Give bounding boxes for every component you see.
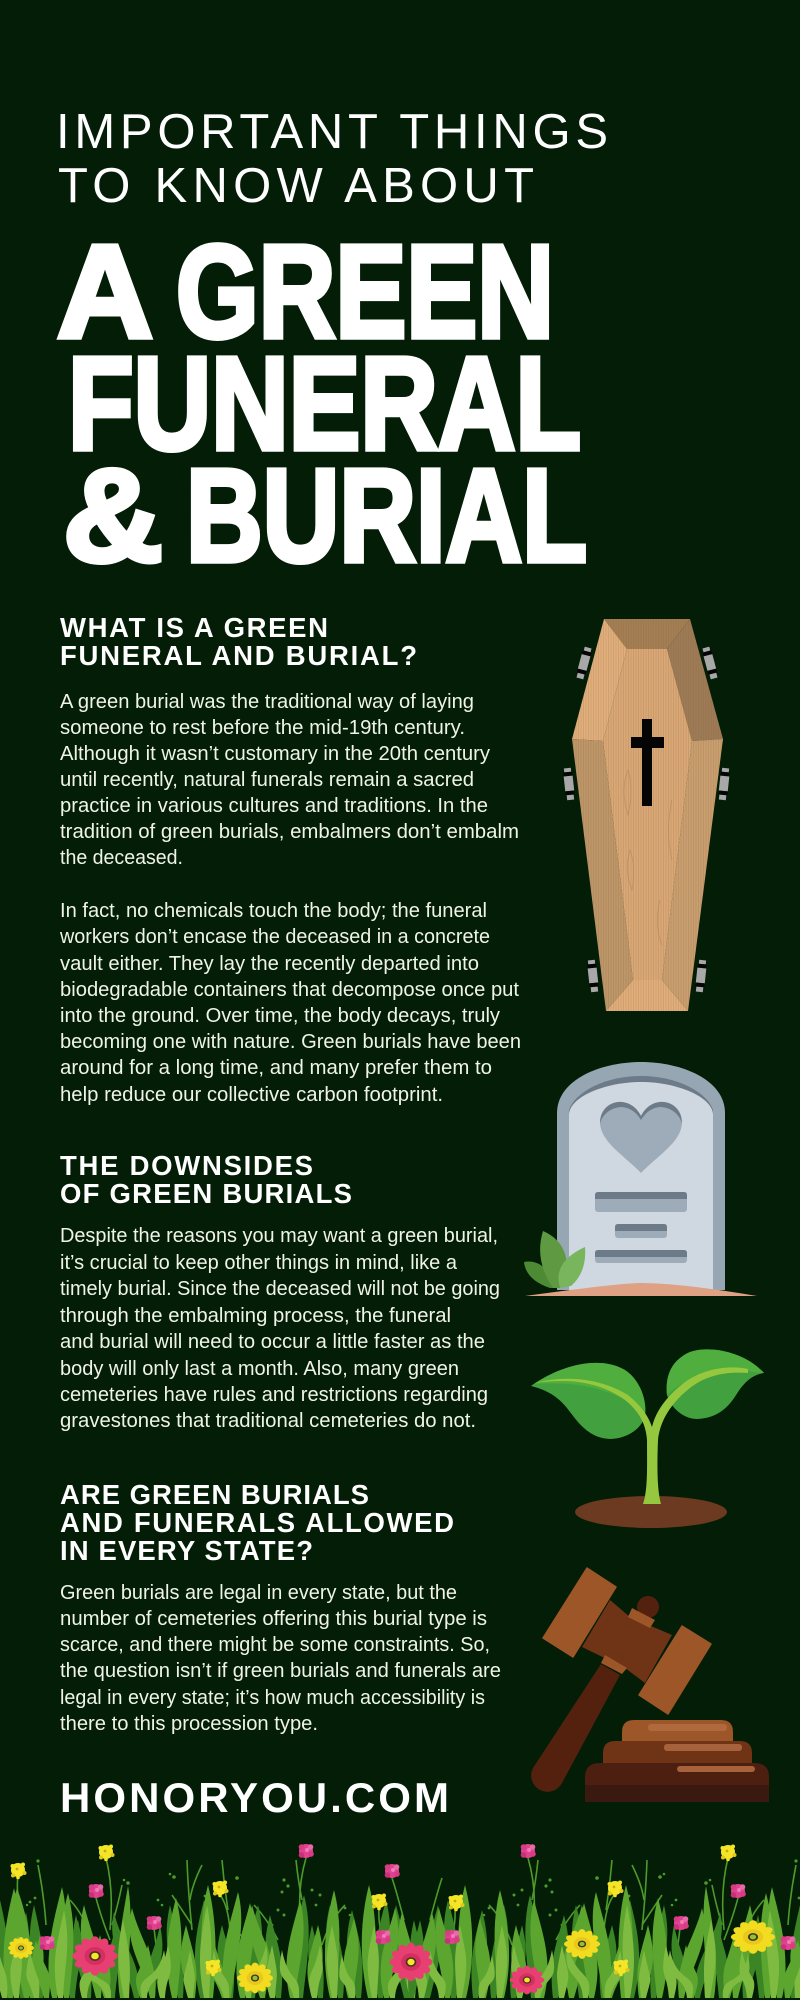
- title: lead-in: IMPORTANT THINGS: [56, 105, 608, 159]
- text block: no chemicals paragraph: around for a long time, and many prefer them to: [60, 1057, 492, 1079]
- text block: downsides: it’s crucial to keep other things in mind, like a: [60, 1252, 458, 1274]
- text block: no chemicals paragraph: becoming one with nature. Green burials have been: [60, 1031, 521, 1053]
- text block: downsides: Despite the reasons you may want a green burial,: [60, 1225, 498, 1247]
- text block: legal in every state: scarce, and there might be some constraints. So,: [60, 1634, 490, 1656]
- text block: legal in every state: Green burials are legal in every state, but the: [60, 1582, 457, 1604]
- text block: downsides: and burial will need to occur a little faster as the: [60, 1331, 485, 1353]
- text block: downsides: [60, 1225, 500, 1432]
- text block: no chemicals paragraph: biodegradable containers that decompose once put: [60, 979, 519, 1001]
- section heading: allowed in every state: IN EVERY STATE?: [60, 1535, 313, 1566]
- text block: downsides: gravestones that traditional cemeteries do not.: [60, 1410, 476, 1432]
- text block: green burial intro: practice in various cultures and traditions. In the: [60, 795, 488, 817]
- text block: green burial intro: the deceased.: [60, 847, 183, 869]
- icon: gravestone with heart: [524, 1062, 757, 1296]
- large yellow flowers: [8, 1920, 775, 1993]
- text block: legal in every state: there to this procession type.: [60, 1713, 318, 1735]
- grass and flowers border: [0, 1844, 800, 2000]
- section heading: what is a green funeral: [60, 612, 417, 671]
- icon: wooden coffin: [563, 619, 730, 1011]
- text block: green burial intro: Although it wasn’t customary in the 20th century: [60, 743, 490, 765]
- text block: legal in every state: [60, 1582, 501, 1735]
- text block: no chemicals paragraph: In fact, no chemicals touch the body; the funeral: [60, 900, 487, 922]
- small yellow flowers: [10, 1844, 736, 1976]
- text block: green burial intro: [60, 691, 519, 869]
- text block: downsides: timely burial. Since the deceased will not be going: [60, 1278, 500, 1300]
- text block: downsides: through the embalming process, the funeral: [60, 1305, 451, 1327]
- large pink flowers: [72, 1936, 544, 1994]
- text block: legal in every state: number of cemeteries offering this burial type is: [60, 1608, 487, 1630]
- icon: green sprout: [531, 1349, 764, 1528]
- website url: HONORYOU.COM: [60, 1774, 449, 1821]
- title: main heading: A: [57, 218, 153, 365]
- text block: legal in every state: the question isn’t if green burials and funerals are: [60, 1660, 501, 1682]
- text block: green burial intro: tradition of green burials, embalmers don’t embalm: [60, 821, 519, 843]
- icon: judge gavel: [531, 1568, 769, 1802]
- title: main heading: &: [63, 442, 163, 589]
- small pink flowers: [40, 1844, 796, 1950]
- text block: no chemicals paragraph: workers don’t encase the deceased in a concrete: [59, 926, 490, 948]
- text block: green burial intro: someone to rest before the mid-19th century.: [60, 717, 465, 739]
- section heading: the downsides: [60, 1150, 352, 1209]
- title: main heading: GREEN: [176, 218, 554, 365]
- title: lead-in: [56, 105, 608, 213]
- section heading: allowed in every state: AND FUNERALS ALLOWED: [60, 1507, 454, 1538]
- text block: downsides: cemeteries have rules and restrictions regarding: [60, 1384, 488, 1406]
- text block: no chemicals paragraph: vault either. They lay the recently departed into: [60, 953, 479, 975]
- title: main heading: [57, 218, 587, 589]
- text block: green burial intro: A green burial was the traditional way of laying: [60, 691, 474, 713]
- text block: no chemicals paragraph: [59, 900, 521, 1106]
- text block: downsides: body will only last a month. Also, many green: [60, 1358, 459, 1380]
- section heading: allowed in every state: [60, 1479, 454, 1566]
- section heading: allowed in every state: ARE GREEN BURIALS: [60, 1479, 369, 1510]
- text block: legal in every state: legal in every state; it’s how much accessibility is: [60, 1687, 485, 1709]
- text block: no chemicals paragraph: help reduce our collective carbon footprint.: [60, 1084, 443, 1106]
- title: main heading: FUNERAL: [68, 330, 581, 477]
- section heading: what is a green funeral: WHAT IS A GREEN: [60, 612, 328, 643]
- section heading: what is a green funeral: FUNERAL AND BURIAL?: [60, 640, 417, 671]
- title: main heading: BURIAL: [186, 442, 587, 589]
- title: lead-in: TO KNOW ABOUT: [58, 159, 534, 213]
- text block: no chemicals paragraph: into the ground. Over time, the body decays, truly: [60, 1005, 500, 1027]
- section heading: the downsides: OF GREEN BURIALS: [60, 1178, 352, 1209]
- text block: green burial intro: until recently, natural funerals remain a sacred: [60, 769, 474, 791]
- section heading: the downsides: THE DOWNSIDES: [60, 1150, 313, 1181]
